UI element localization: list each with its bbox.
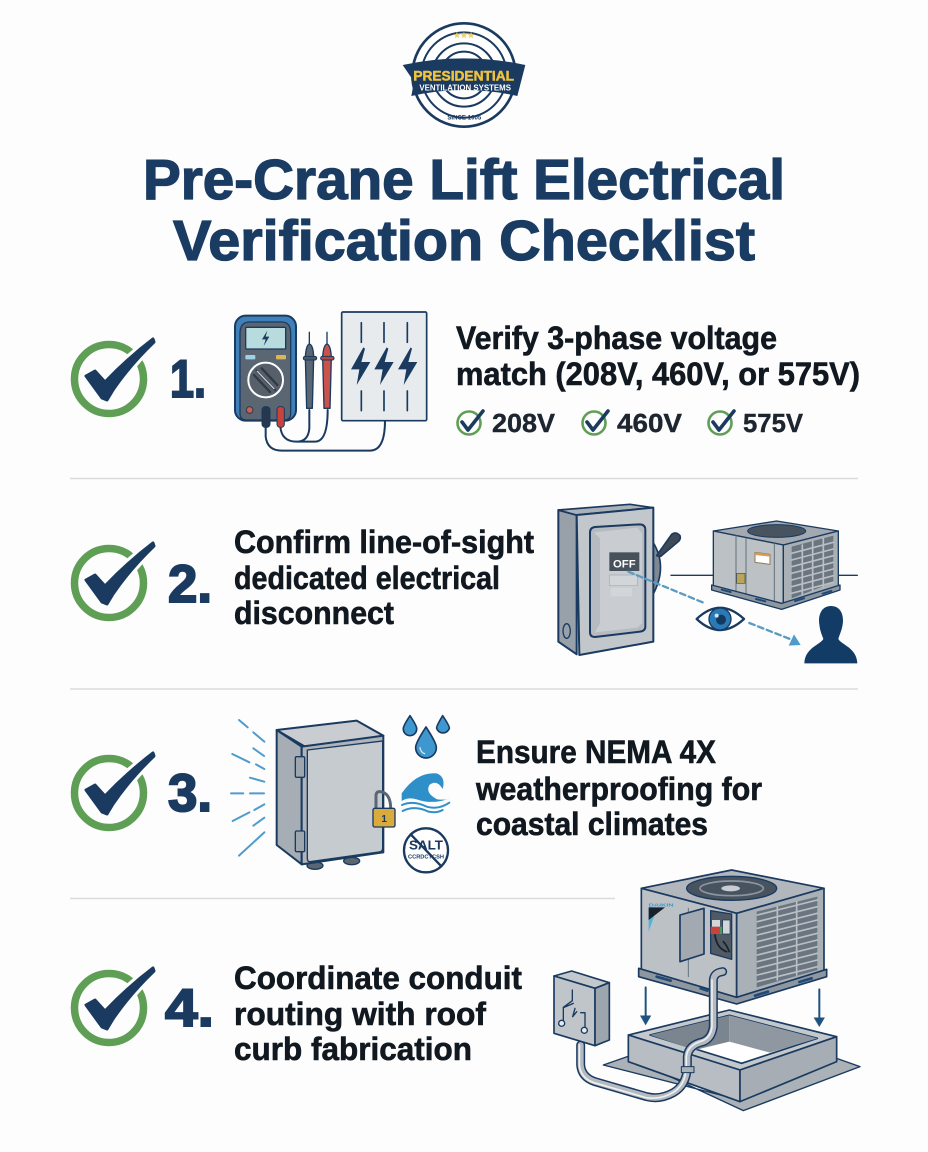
sight line	[628, 572, 790, 639]
step 2 text: dedicated electrical	[234, 560, 500, 596]
illustration: NEMA 4X enclosure with weather icons	[231, 716, 449, 872]
disconnect enclosure: OFF	[613, 558, 636, 570]
icon: water drops	[403, 716, 449, 758]
step 1 text	[456, 320, 860, 392]
step 2 text: disconnect	[234, 595, 394, 631]
step 1 text: match (208V, 460V, or 575V)	[456, 356, 860, 392]
step 3 text: coastal climates	[476, 806, 708, 842]
logo: Presidential Ventilation Systems	[403, 23, 525, 127]
option 460V	[582, 408, 683, 438]
step number 2: 2.	[168, 555, 212, 614]
title: Pre-Crane Lift Electrical	[143, 148, 785, 212]
icon: no salt corrosion: CCRDCTCSH	[408, 854, 444, 860]
option 575V	[708, 408, 804, 438]
rooftop unit	[639, 870, 827, 1004]
icon: step 1 check mark	[74, 339, 154, 414]
hinges	[295, 757, 305, 852]
icon: multimeter with probes and three-phase panel	[235, 312, 427, 451]
disconnect enclosure	[558, 504, 653, 655]
rooftop unit	[712, 521, 840, 609]
logo: Presidential Ventilation Systems: PRESIDENTIAL	[413, 68, 514, 84]
step 1 text: Verify 3-phase voltage	[456, 320, 777, 356]
unit brand mark: DAIKIN	[649, 903, 674, 909]
icon: padlock	[373, 792, 395, 827]
option 208V: 208V	[492, 408, 556, 438]
wiring line	[671, 573, 857, 577]
conduit	[579, 972, 723, 1098]
roof curb	[603, 1010, 860, 1111]
disconnect handle	[653, 533, 680, 595]
illustration: disconnect switch, rooftop unit and observer	[558, 504, 857, 663]
voltage options	[458, 408, 804, 438]
icon: no salt corrosion	[404, 828, 448, 872]
icon: step 2 check mark	[74, 543, 154, 618]
open electrical access panel	[680, 908, 732, 962]
step 4 text: Coordinate conduit	[234, 960, 522, 996]
step number 1: 1.	[170, 350, 206, 409]
unit brand mark	[649, 903, 674, 932]
step 3 text	[475, 734, 762, 842]
icon: step 4 check mark	[74, 968, 154, 1042]
enclosure	[277, 721, 383, 869]
title: Verification Checklist	[173, 209, 755, 273]
icon: wave	[402, 773, 449, 812]
icon: no salt corrosion: SALT	[409, 837, 443, 852]
arrowhead	[789, 634, 801, 646]
step 4 text: curb fabrication	[234, 1031, 472, 1067]
illustration: rooftop unit over curb with conduit	[554, 870, 860, 1111]
spray lines	[231, 720, 264, 856]
logo: Presidential Ventilation Systems: ★★★	[453, 31, 475, 40]
step 2: line-of-sight disconnect	[74, 504, 857, 663]
step 4: conduit routing	[74, 870, 860, 1111]
option 575V: 575V	[743, 408, 804, 438]
step 3: NEMA 4X weatherproofing	[74, 716, 762, 872]
junction box	[554, 971, 609, 1046]
logo: Presidential Ventilation Systems: VENTILATION SYSTEMS	[419, 84, 512, 93]
icon: padlock: 1	[381, 814, 387, 825]
step 2 text	[234, 524, 534, 631]
step 2 text: Confirm line-of-sight	[234, 524, 534, 560]
step 4 text: routing with roof	[234, 996, 486, 1032]
step number 3: 3.	[168, 764, 212, 823]
title	[143, 148, 785, 273]
option 208V	[458, 408, 556, 438]
step 4 text	[234, 960, 522, 1067]
arrows down to curb	[640, 987, 825, 1027]
option 460V: 460V	[617, 408, 683, 438]
step number 4: 4.	[165, 979, 214, 1038]
step 3 text: Ensure NEMA 4X	[476, 734, 717, 770]
icon: eye	[697, 608, 744, 630]
icon: person silhouette	[804, 606, 857, 663]
icon: step 3 check mark	[74, 753, 154, 828]
logo: Presidential Ventilation Systems: SINCE 1005	[447, 114, 482, 121]
step 1: verify voltage	[74, 312, 860, 451]
step 3 text: weatherproofing for	[475, 771, 762, 807]
